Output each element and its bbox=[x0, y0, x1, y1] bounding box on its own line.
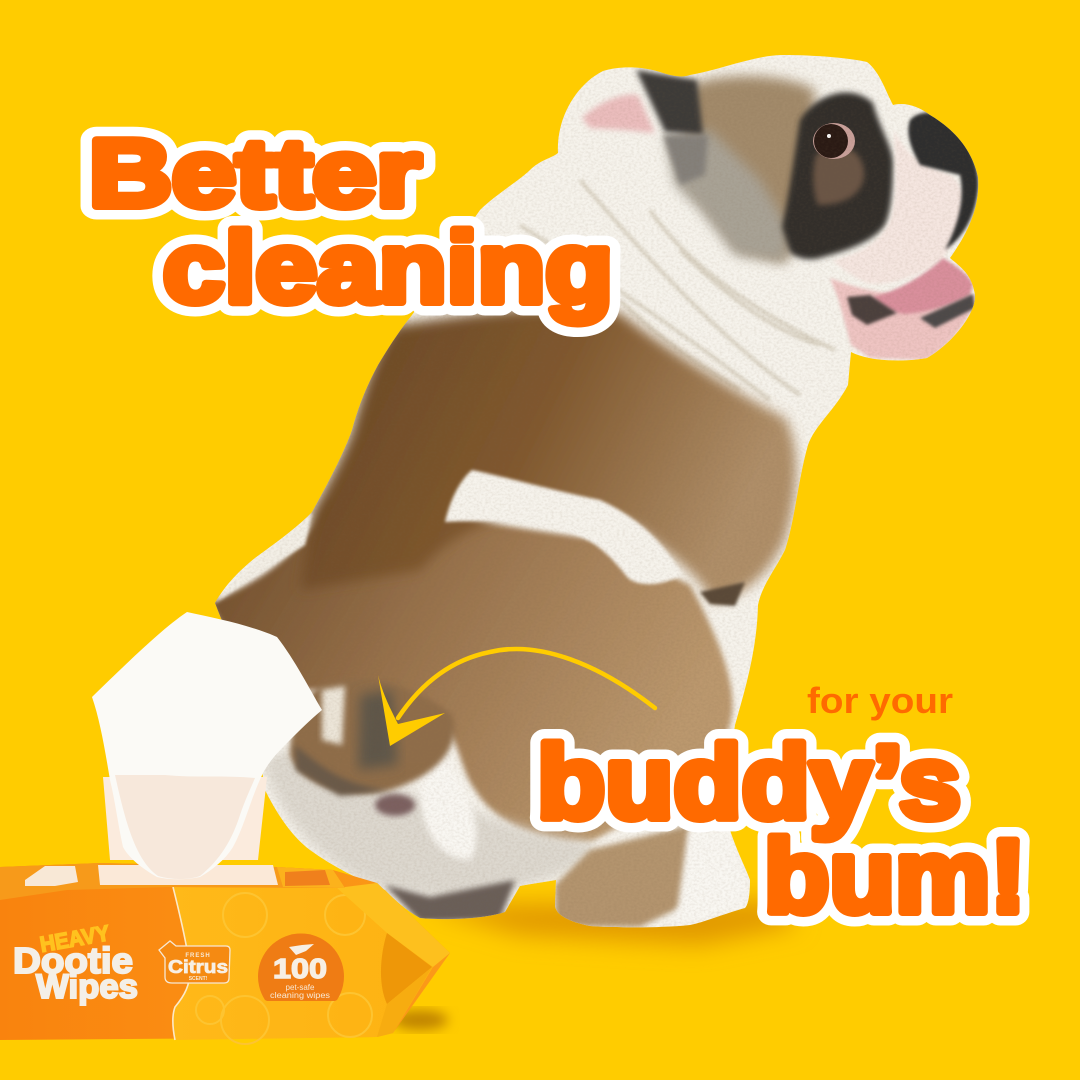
pack: body orange side bbox=[0, 863, 450, 1040]
dog: lower belly bbox=[262, 752, 595, 901]
bulldog photo illustration bbox=[200, 50, 1000, 940]
pack: divider line bbox=[173, 887, 190, 1040]
pack: side pocket bbox=[381, 933, 432, 1004]
pack: 100 count badge: 100 bbox=[273, 953, 327, 984]
dog: head tan fur bbox=[685, 76, 815, 262]
dog: eye bbox=[813, 123, 855, 159]
dog: white below tail bbox=[419, 788, 478, 862]
pack: lower right seam bbox=[377, 967, 432, 1037]
heading: Better cleaning: cleaning bbox=[163, 212, 613, 324]
pack: citrus badge bbox=[159, 941, 230, 983]
heading: buddy's bum! bbox=[537, 725, 1026, 935]
dog: left white band bbox=[215, 512, 312, 603]
pack: citrus slice pattern bbox=[196, 893, 372, 1044]
dog: neck wrinkles bbox=[520, 180, 835, 400]
heading: buddy's bum!: buddy’s bbox=[537, 725, 961, 841]
dog: muzzle bbox=[833, 130, 963, 284]
pack: right fold bbox=[337, 883, 450, 967]
heading: Better cleaning: cleaning bbox=[163, 212, 613, 324]
dog: dark leg crease bbox=[700, 582, 745, 606]
pack: top surface bbox=[0, 863, 345, 900]
dog: dark underside bbox=[385, 880, 515, 922]
pack: dispenser lid back bbox=[103, 777, 267, 860]
pack: 100 count badge: cleaning wipes bbox=[270, 991, 330, 1000]
dog: grey below ear bbox=[663, 135, 708, 185]
pack: wipes text bbox=[13, 920, 138, 1006]
dog: rump brown bbox=[210, 500, 733, 842]
pack: yellow right side bbox=[173, 887, 433, 1040]
pack: wipes text: Wipes bbox=[36, 968, 138, 1006]
dog: nose band bbox=[908, 113, 978, 250]
pack: 100 count badge: pet-safe bbox=[286, 983, 315, 992]
heading: buddy's bum!: buddy’s bbox=[537, 725, 961, 841]
dog: ear inner bbox=[582, 95, 655, 133]
subheading: for your: for your bbox=[807, 680, 953, 721]
dog: dark ear base bbox=[636, 70, 703, 135]
dog: brown back patch bbox=[300, 308, 796, 602]
pack: wipes text: HEAVY bbox=[38, 920, 112, 957]
dog: tail bbox=[290, 679, 454, 793]
heading: buddy's bum!: bum! bbox=[764, 819, 1026, 935]
pack: citrus badge: SCENT! bbox=[189, 976, 208, 982]
heading: buddy's bum!: bum! bbox=[764, 819, 1026, 935]
dog: lower lip bbox=[830, 278, 975, 360]
heading: Better cleaning bbox=[89, 120, 613, 324]
product: wipes package bbox=[0, 777, 450, 1044]
pack: lid bbox=[98, 865, 278, 885]
dog: hind foot bbox=[555, 825, 695, 927]
dog: lip markings bbox=[847, 295, 897, 325]
heading: Better cleaning: Better bbox=[89, 120, 421, 227]
wet wipe emerging from pack bbox=[92, 612, 322, 879]
pack: citrus badge: Citrus bbox=[168, 957, 228, 977]
dog: white coat base bbox=[200, 50, 1000, 940]
dog: dark eye patch bbox=[782, 93, 893, 259]
dog: tongue bbox=[873, 258, 973, 314]
pack: wipes text: Dootie bbox=[13, 940, 133, 981]
pack: top logo mark bbox=[25, 866, 78, 886]
dog: white shoulder patch bbox=[445, 470, 682, 584]
dog: grey cheek bbox=[665, 130, 790, 262]
pack: citrus badge: FRESH bbox=[185, 953, 211, 959]
dog: fur texture bbox=[200, 50, 1000, 940]
ground shadow bbox=[392, 900, 800, 1030]
arrow pointing to bum bbox=[378, 649, 655, 746]
wipe: translucent lower section bbox=[115, 775, 255, 879]
heading: Better cleaning: Better bbox=[89, 120, 421, 227]
pack: 100 count badge bbox=[258, 933, 344, 1001]
dog: anus shadow bbox=[375, 794, 415, 816]
